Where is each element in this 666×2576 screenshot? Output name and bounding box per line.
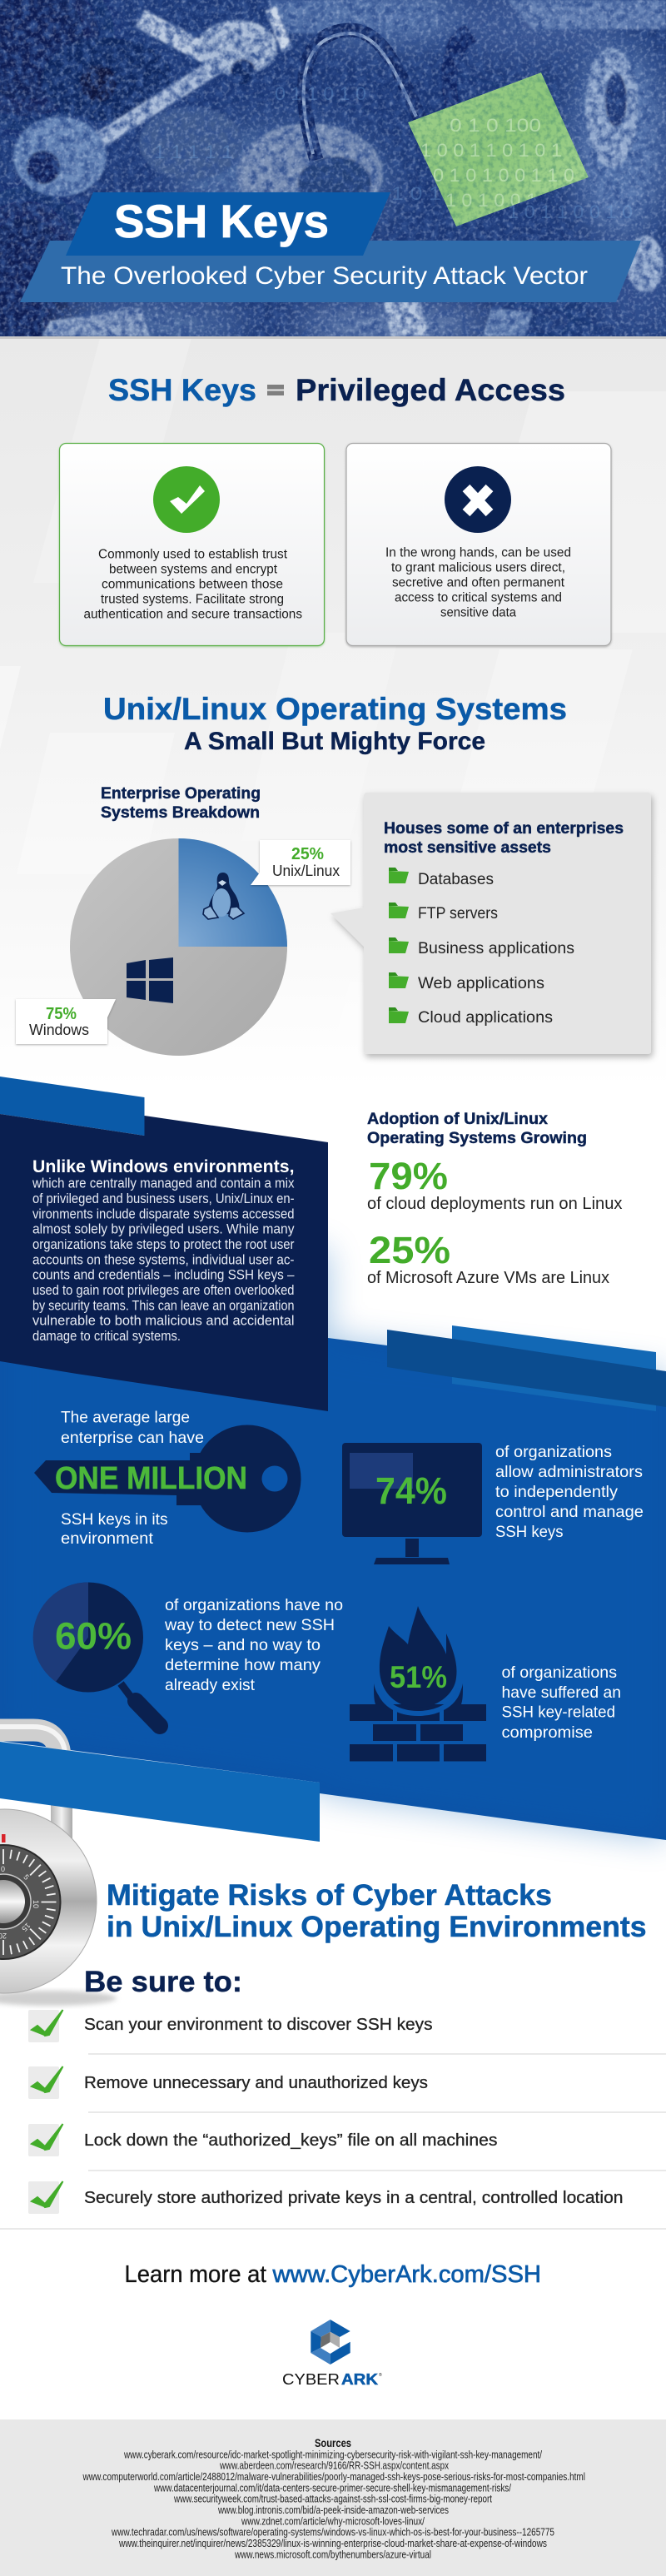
heading: SSH Keys = Privileged Access: Privileged Access <box>296 373 565 407</box>
trusted use text <box>83 548 302 622</box>
stat: 51% compromise: 51% <box>390 1660 447 1694</box>
checklist item: securely store <box>28 2181 624 2214</box>
panel heading: Houses some of an enterprises <box>384 820 624 838</box>
icon: combination padlock: 0 <box>1 1865 5 1873</box>
stat: 74% administrators: allow administrators <box>495 1463 643 1481</box>
stat: 25% Azure VMs: of Microsoft Azure VMs are Linux <box>367 1269 609 1287</box>
hero: green padlock: 0 1 0 100 <box>450 115 541 136</box>
wrong hands text: access to critical systems and <box>395 590 562 604</box>
heading: enterprise breakdown <box>101 785 261 822</box>
checklist item: lock down: Lock down the “authorized_keys” file on all machines <box>84 2131 498 2150</box>
icon: combination padlock: 10 <box>32 1900 40 1908</box>
heading: Be sure to: Be sure to: <box>84 1966 242 1998</box>
CyberArk logo: ARK <box>341 2371 378 2388</box>
call to action <box>125 2261 541 2288</box>
panel: trusted use card <box>60 443 325 646</box>
stat: 79% cloud deployments <box>367 1155 623 1213</box>
adoption heading: Adoption of Unix/Linux <box>367 1111 548 1128</box>
hero: open shackle <box>304 30 421 160</box>
stat: one million keys <box>34 1409 301 1548</box>
panel: wrong hands card <box>346 443 611 646</box>
stat: one million keys: SSH keys in its <box>61 1510 168 1529</box>
heading: Unix/Linux Operating Systems <box>103 692 567 755</box>
heading: Mitigate Risks: in Unix/Linux Operating Environments <box>107 1911 646 1943</box>
panel body text: accounts on these systems, individual user ac- <box>32 1252 295 1267</box>
list item: Web applications: Web applications <box>418 975 544 992</box>
panel lead sentence: Unlike Windows environments, <box>32 1156 295 1176</box>
title: SSH Keys <box>114 195 329 247</box>
stat: 51% compromise: SSH key-related <box>501 1703 615 1722</box>
hero photo: keys and padlocks <box>0 0 666 366</box>
stat: 74% administrators: of organizations <box>495 1443 612 1461</box>
sources panel <box>0 2419 666 2576</box>
stat: 25% Azure VMs <box>367 1229 609 1287</box>
panel body text: damage to critical systems. <box>32 1329 181 1344</box>
stat: one million keys: The average large <box>61 1409 190 1427</box>
wrong hands text: In the wrong hands, can be used <box>385 545 571 559</box>
stat: one million keys: environment <box>61 1529 154 1548</box>
sources list: www.cyberark.com/resource/idc-market-spotlight-minimizing-cybersecurity-risk-with-vigilant-ssh-key-management/ <box>123 2449 542 2460</box>
trusted use text: between systems and encrypt <box>109 563 278 577</box>
list item: Web applications <box>389 972 544 992</box>
icon: green check <box>153 466 220 533</box>
wrong hands text <box>385 545 571 619</box>
list item: Cloud applications: Cloud applications <box>418 1009 553 1027</box>
list item: Business applications: Business applications <box>418 940 574 957</box>
sources list: www.datacenterjournal.com/it/data-centers-secure-primer-secure-shell-key-mismanagement-risks/ <box>153 2482 511 2494</box>
icon: Linux penguin <box>203 873 244 919</box>
panel body text <box>32 1176 295 1344</box>
panel body text: which are centrally managed and contain a mix <box>32 1176 295 1191</box>
icon: navy X <box>445 466 511 533</box>
hero: green padlock <box>408 72 589 226</box>
heading: enterprise breakdown: Systems Breakdown <box>101 804 260 822</box>
stat: 60% no detection <box>33 1582 343 1726</box>
stat: 74% administrators: SSH keys <box>495 1523 564 1541</box>
sources list: www.blog.intronis.com/bid/a-peek-inside-amazon-web-services <box>217 2504 449 2516</box>
checklist item: scan <box>28 2010 433 2042</box>
stat: 25% Azure VMs: 25% <box>369 1229 450 1271</box>
stat: 74% administrators: 74% <box>375 1470 447 1512</box>
CyberArk logo: CYBER <box>282 2371 340 2388</box>
panel body text: counts and credentials – including SSH keys – <box>32 1268 295 1283</box>
stat: 60% no detection: already exist <box>165 1676 256 1694</box>
sources list <box>82 2449 585 2560</box>
call to action: Learn more at <box>125 2261 266 2288</box>
heading: Unix/Linux Operating Systems: A Small But Mighty Force <box>184 728 485 755</box>
stat: 51% compromise: of organizations <box>501 1663 617 1682</box>
panel body text: vulnerable to both malicious and accidental <box>32 1314 295 1329</box>
trusted use text: Commonly used to establish trust <box>98 548 288 562</box>
stat: 74% administrators: to independently <box>495 1483 618 1501</box>
icon: combination padlock <box>0 1727 320 2006</box>
panel body text: by security teams. This can leave an organization <box>32 1298 295 1313</box>
wrong hands text: secretive and often permanent <box>392 575 565 589</box>
adoption statistics <box>367 1111 623 1287</box>
heading: enterprise breakdown: Enterprise Operating <box>101 785 261 803</box>
stat: 51% compromise: compromise <box>501 1723 593 1742</box>
checklist item: securely store: Securely store authorized private keys in a central, controlled location <box>84 2189 624 2207</box>
sources list: www.news.microsoft.com/bythenumbers/azure-virtual <box>234 2549 431 2560</box>
sources heading: Sources <box>315 2436 351 2449</box>
icon: combination padlock: 5 <box>22 1872 31 1882</box>
panel: sensitive assets list <box>331 793 651 1054</box>
call to action: www.CyberArk.com/SSH <box>271 2261 541 2288</box>
blue statistics background <box>0 1249 666 1840</box>
trusted use text: communications between those <box>102 578 283 592</box>
icon: firewall <box>350 1606 486 1762</box>
panel body text: organizations take steps to protect the root user <box>32 1237 295 1252</box>
panel body text: vironments include disparate systems accessed <box>32 1207 295 1222</box>
checklist item: lock down <box>28 2124 498 2156</box>
stat: 74% administrators <box>342 1443 644 1564</box>
heading: Mitigate Risks <box>107 1879 646 1943</box>
sources list: www.techradar.com/us/news/software/operating-systems/windows-vs-linux-which-os-is-best-for-your-business--1265775 <box>111 2527 554 2539</box>
sources list: www.aberdeen.com/research/9166/RR-SSH.aspx/content.aspx <box>219 2460 450 2472</box>
stat: one million keys: enterprise can have <box>61 1429 204 1447</box>
CyberArk logo: ® <box>379 2372 382 2378</box>
checklist item: remove <box>28 2066 428 2099</box>
stat: 60% no detection: of organizations have no <box>165 1596 343 1614</box>
hero: green padlock: 1 0 0 1 1 0 1 0 1 <box>420 140 562 161</box>
stat: one million keys: ONE MILLION <box>55 1461 247 1496</box>
stat: 60% no detection: determine how many <box>165 1656 321 1674</box>
stat: 51% compromise <box>350 1606 621 1762</box>
CyberArk logo <box>282 2320 382 2388</box>
hero: binary overlay: 1 1 1 1 1 <box>154 142 233 162</box>
icon: magnifying glass <box>33 1582 160 1726</box>
panel body text: almost solely by privileged users. While many <box>32 1222 295 1237</box>
icon: combination padlock: 15 <box>20 1922 32 1933</box>
callout: 75% Windows: Windows <box>29 1021 89 1038</box>
stat: 60% no detection: keys – and no way to <box>165 1636 321 1654</box>
subtitle: The Overlooked Cyber Security Attack Vector <box>61 262 588 290</box>
heading: SSH Keys = Privileged Access <box>108 373 565 407</box>
adoption heading: Operating Systems Growing <box>367 1130 587 1147</box>
hero: binary overlay: 1 0 1 1 0 0 1 0 <box>508 201 633 222</box>
panel body text: used to gain root privileges are often overlooked <box>32 1283 295 1298</box>
hero: binary overlay: 0 1 1 0 1 0 <box>275 83 366 104</box>
panel heading <box>384 820 624 857</box>
adoption heading <box>367 1111 587 1147</box>
hero: binary overlay <box>154 83 633 222</box>
checklist item: scan: Scan your environment to discover SSH keys <box>84 2016 433 2034</box>
hero: binary overlay: 1 0 1 <box>391 183 441 204</box>
callout: 75% Windows: 75% <box>46 1005 77 1023</box>
stat: 51% compromise: have suffered an <box>501 1683 621 1702</box>
hero: padlocks behind the keys <box>42 0 666 336</box>
sources list: www.zdnet.com/article/why-microsoft-loves-linux/ <box>241 2515 425 2527</box>
hero: green padlock: 1 0 1 0 0 1 <box>445 190 537 211</box>
hero: large keys <box>13 8 287 196</box>
stat: 74% administrators: control and manage <box>495 1503 644 1521</box>
title banner <box>20 192 641 302</box>
icon: Windows logo <box>127 957 173 1003</box>
panel heading: most sensitive assets <box>384 839 551 857</box>
heading: Mitigate Risks: Mitigate Risks of Cyber Attacks <box>107 1879 552 1912</box>
hero: green padlock: 0 1 0 1 0 0 1 1 0 <box>433 165 574 186</box>
list item: FTP servers <box>389 903 498 922</box>
trusted use text: authentication and secure transactions <box>83 608 302 622</box>
wrong hands text: to grant malicious users direct, <box>391 560 565 574</box>
sources list: www.theinquirer.net/inquirer/news/2385329/linux-is-winning-enterprise-cloud-market-share-at-expense-of-windows <box>118 2538 547 2549</box>
sources list: www.securityweek.com/trust-based-attacks-against-ssh-ssl-cost-firms-big-money-report <box>173 2494 492 2505</box>
panel body text: of privileged and business users, Unix/Linux en- <box>32 1191 295 1206</box>
list item: Databases <box>389 868 494 888</box>
callout: 25% Unix/Linux <box>251 840 350 885</box>
callout: 75% Windows <box>16 999 116 1044</box>
heading: SSH Keys = Privileged Access: SSH Keys <box>108 373 256 407</box>
wrong hands text: sensitive data <box>440 605 516 619</box>
stat: 60% no detection: way to detect new SSH <box>164 1616 335 1634</box>
stat: 79% cloud deployments: 79% <box>369 1155 448 1197</box>
stat: 79% cloud deployments: of cloud deployments run on Linux <box>367 1195 623 1213</box>
trusted use text: trusted systems. Facilitate strong <box>101 593 284 607</box>
stat: 60% no detection: 60% <box>55 1615 132 1658</box>
callout: 25% Unix/Linux: Unix/Linux <box>272 862 340 879</box>
panel: Unlike Windows text block <box>0 1077 328 1411</box>
pie chart: operating systems <box>16 838 350 1056</box>
list item: FTP servers: FTP servers <box>418 905 498 922</box>
callout: 25% Unix/Linux: 25% <box>291 845 324 863</box>
heading: Unix/Linux Operating Systems: Unix/Linux Operating Systems <box>103 692 567 726</box>
icon: key <box>34 1425 301 1532</box>
checklist item: remove: Remove unnecessary and unauthorized keys <box>84 2074 428 2092</box>
icon: monitor <box>342 1443 482 1564</box>
list item: Databases: Databases <box>418 871 494 888</box>
